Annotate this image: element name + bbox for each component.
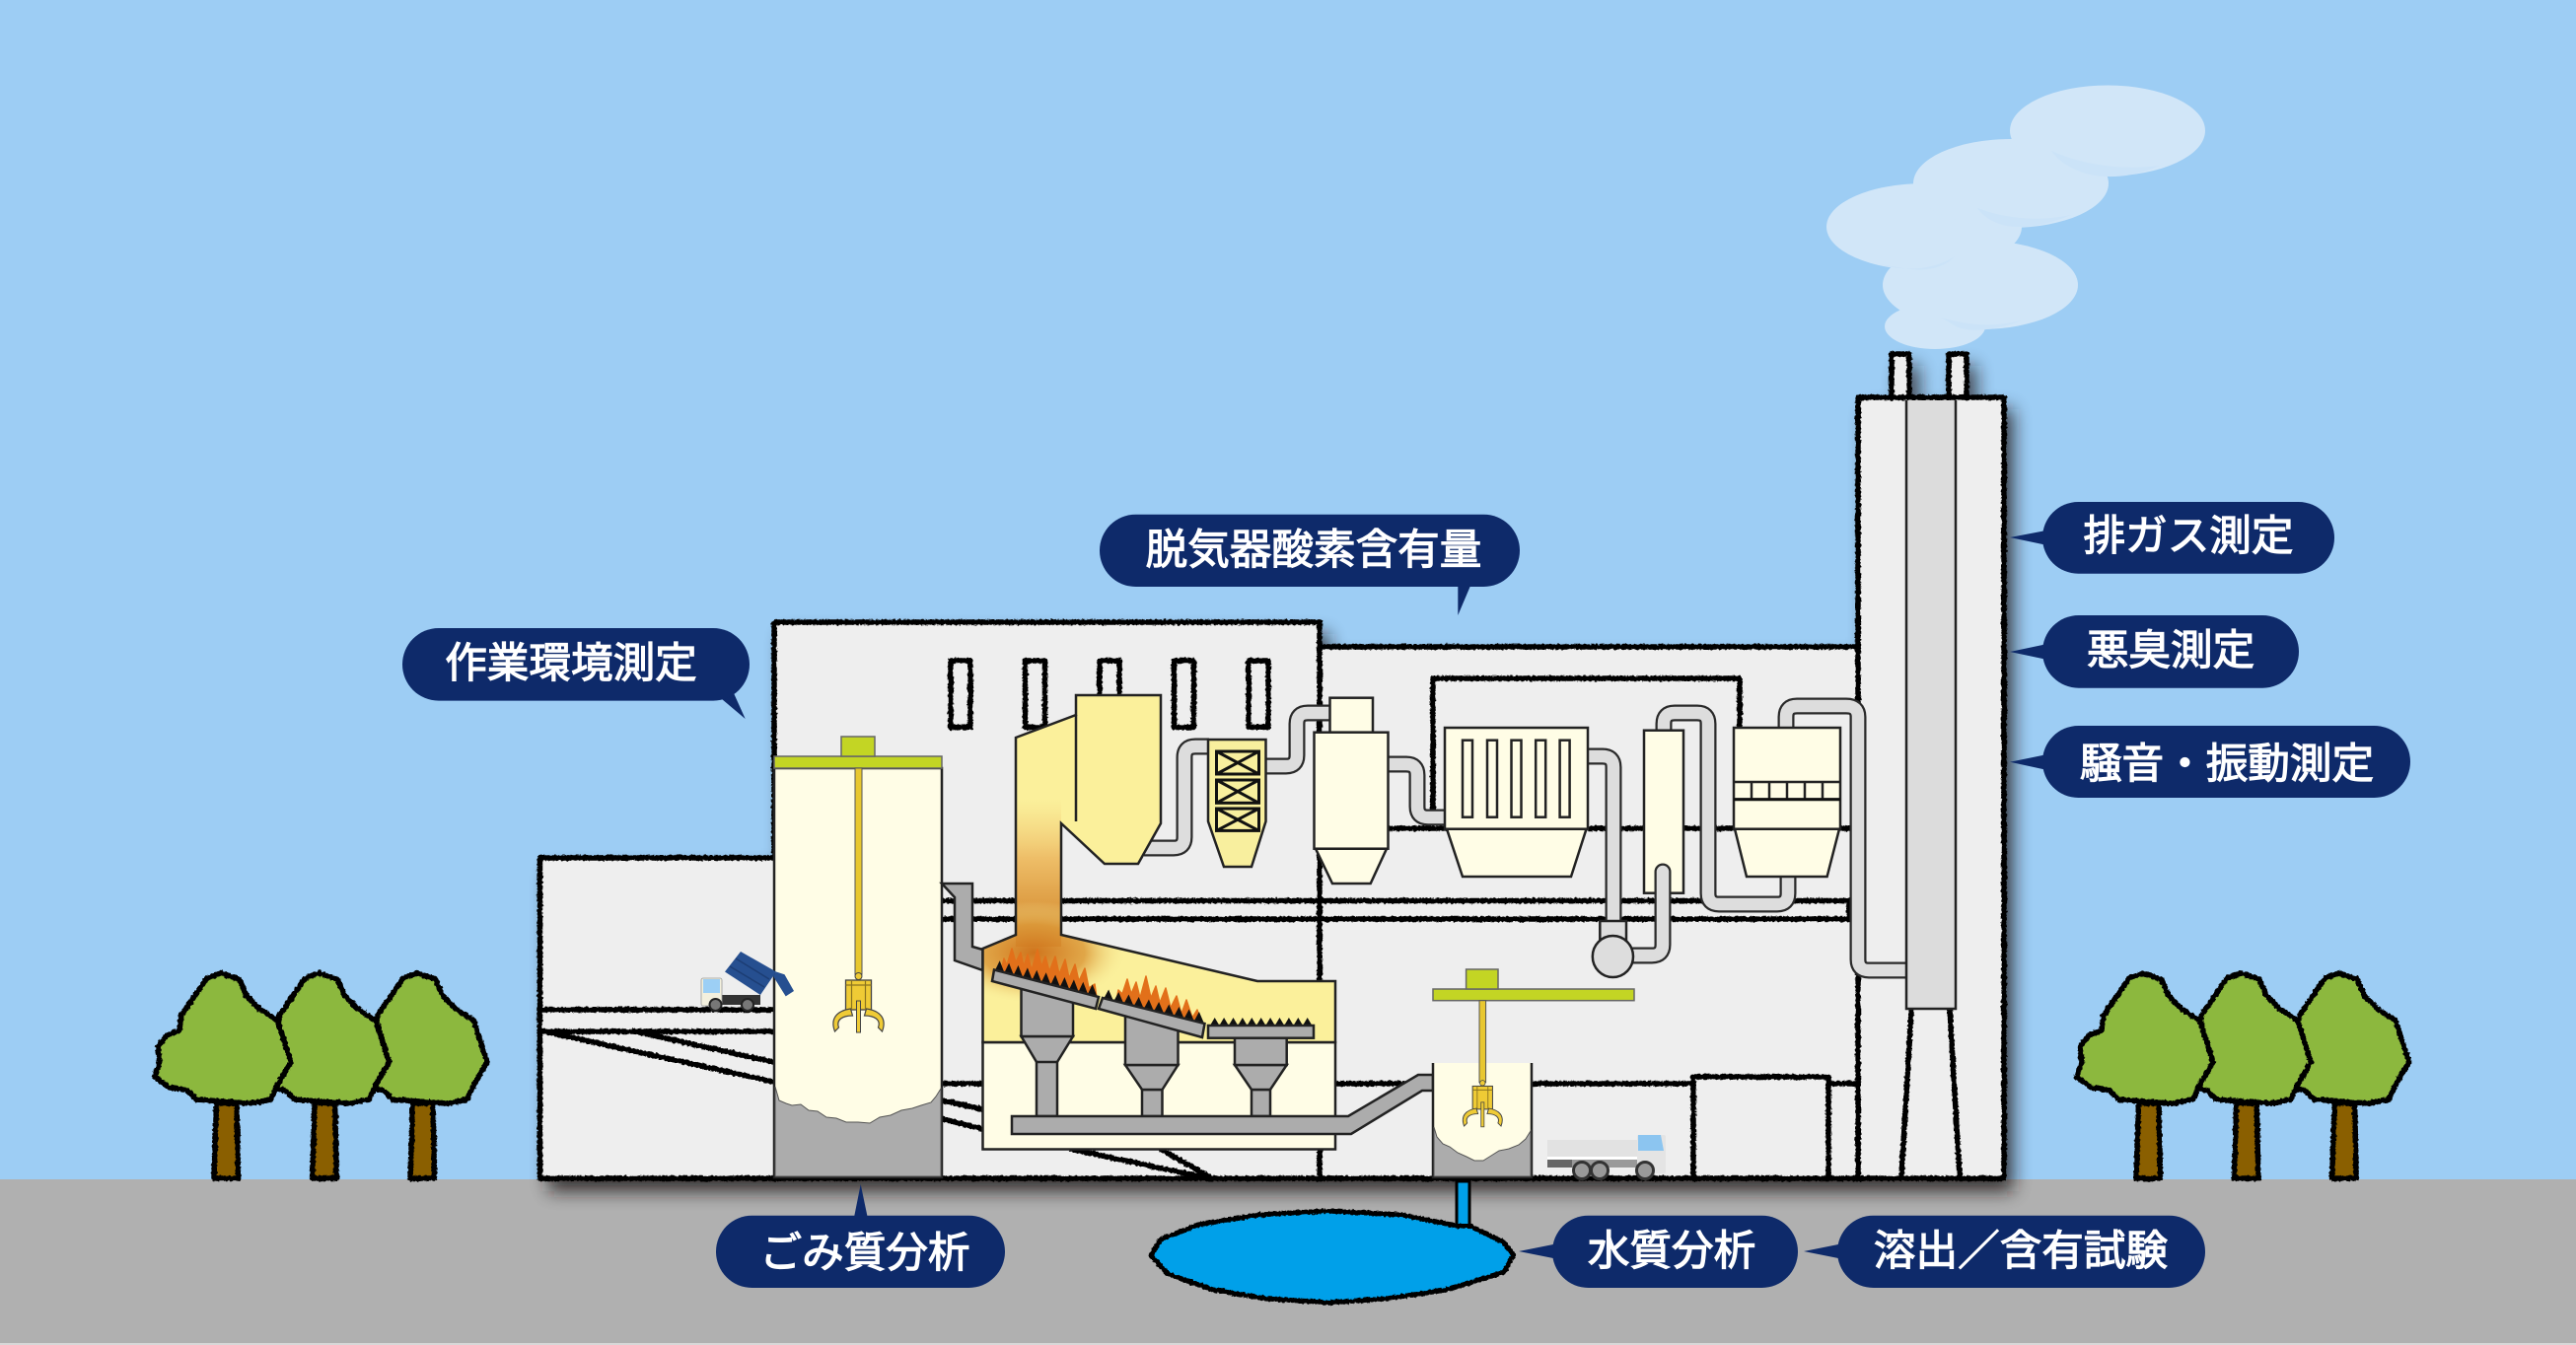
building body bbox=[539, 354, 2004, 1179]
duct pipes bbox=[1144, 706, 1907, 970]
ash hopper 3 bbox=[1235, 1037, 1287, 1116]
callout: ごみ質分析 bbox=[716, 1184, 1005, 1288]
pond bbox=[1151, 1211, 1514, 1303]
grate 2 bbox=[1099, 990, 1205, 1037]
building structure lines bbox=[539, 354, 2004, 1178]
callout: 溶出／含有試験 bbox=[1804, 1216, 2205, 1288]
bunker crane cable bbox=[855, 768, 862, 974]
callout: 騒音・振動測定: 騒音・振動測定 bbox=[2080, 741, 2374, 788]
ground bbox=[0, 1179, 2576, 1345]
callout: 水質分析: 水質分析 bbox=[1588, 1228, 1755, 1275]
ash pit bbox=[1433, 1063, 1532, 1177]
ash hopper 2 bbox=[1125, 1016, 1178, 1116]
ash conveyor bbox=[1012, 1075, 1433, 1134]
ash crane grab bbox=[1463, 1081, 1502, 1127]
bunker crane grab bbox=[833, 972, 884, 1032]
smoke clouds bbox=[1826, 85, 2205, 349]
callout: 排ガス測定: 排ガス測定 bbox=[2084, 513, 2293, 560]
ash crane cable bbox=[1479, 1001, 1486, 1083]
induced draft fan bbox=[1593, 921, 1633, 977]
bunker crane top bbox=[841, 737, 875, 756]
callout: 排ガス測定 bbox=[2010, 502, 2334, 574]
crane bar bbox=[774, 756, 942, 768]
callout: 脱気器酸素含有量: 脱気器酸素含有量 bbox=[1146, 527, 1481, 574]
fan duct bbox=[1627, 872, 1663, 956]
grate 3 bbox=[1208, 1018, 1314, 1038]
ash truck bbox=[1547, 1135, 1666, 1179]
callout: 脱気器酸素含有量 bbox=[1100, 515, 1520, 615]
callout: 溶出／含有試験: 溶出／含有試験 bbox=[1874, 1228, 2168, 1275]
callout: 水質分析 bbox=[1519, 1216, 1798, 1288]
bag filter bbox=[1445, 728, 1588, 877]
furnace lower chamber bbox=[982, 1042, 1335, 1150]
waste bunker bbox=[774, 756, 942, 1177]
trees right bbox=[2077, 973, 2409, 1178]
callout: 悪臭測定 bbox=[2010, 615, 2299, 688]
ash crane top bbox=[1467, 969, 1498, 989]
callout: 悪臭測定: 悪臭測定 bbox=[2087, 627, 2254, 674]
reactor bbox=[1208, 740, 1266, 867]
flames bbox=[1000, 949, 1201, 1026]
ash crane bar bbox=[1433, 989, 1634, 1001]
callout: ごみ質分析: ごみ質分析 bbox=[760, 1230, 969, 1277]
callout: 作業環境測定 bbox=[402, 628, 750, 719]
dump truck bbox=[701, 952, 794, 1011]
scrubber tower bbox=[1644, 731, 1683, 893]
building shadow bbox=[548, 366, 2013, 1191]
furnace and boiler bbox=[940, 695, 1335, 1042]
grate 1 bbox=[992, 960, 1099, 1009]
cyclone bbox=[1314, 698, 1389, 884]
bottom edge highlight bbox=[0, 1343, 2576, 1345]
callout: 騒音・振動測定 bbox=[2010, 726, 2410, 798]
second filter bbox=[1734, 728, 1840, 877]
trees left bbox=[155, 973, 487, 1178]
ash hopper 1 bbox=[1022, 986, 1073, 1116]
groundwater pipe bbox=[1457, 1181, 1469, 1229]
callout: 作業環境測定: 作業環境測定 bbox=[445, 640, 697, 687]
ash feed chute bbox=[942, 884, 982, 970]
chimney flue bbox=[1906, 400, 1956, 1009]
